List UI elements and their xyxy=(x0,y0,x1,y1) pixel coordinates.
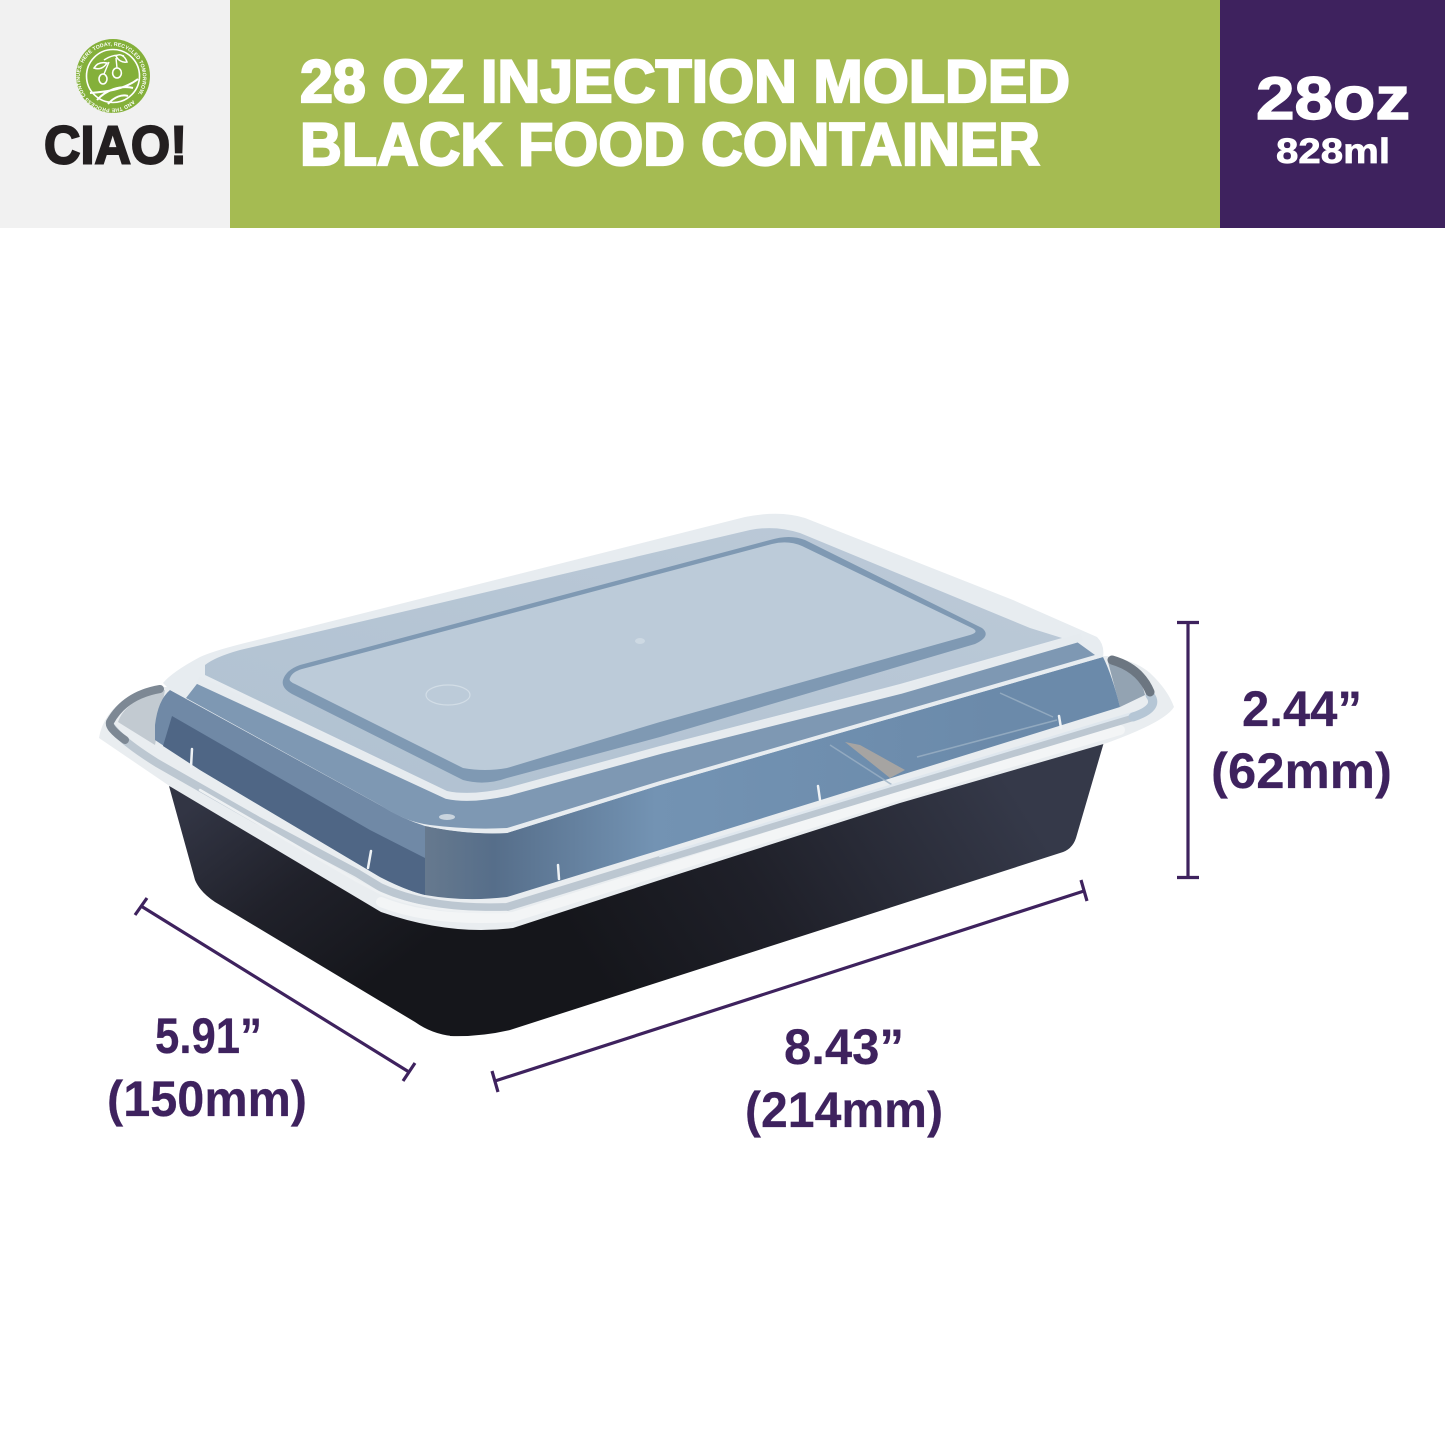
lid front wall xyxy=(425,657,1120,899)
panel: title banner xyxy=(230,0,1220,228)
container body xyxy=(169,742,1104,1036)
wall reflections xyxy=(830,693,1057,790)
rim interior corners xyxy=(118,662,1145,745)
capacity text: 28oz xyxy=(1256,65,1410,132)
product image: food container xyxy=(99,514,1174,1036)
lid raised panel xyxy=(283,537,986,783)
dimension label: width: 5.91” xyxy=(155,1008,262,1064)
panel: logo xyxy=(0,0,230,228)
dimension line: height xyxy=(1177,622,1199,878)
heading xyxy=(300,48,1070,178)
heading: BLACK FOOD CONTAINER xyxy=(300,111,1040,178)
lid clips xyxy=(191,716,1061,879)
rim tube xyxy=(110,660,1153,918)
lid white band xyxy=(198,637,1082,797)
lid left wall xyxy=(155,690,425,895)
dimension label: width xyxy=(107,1008,307,1127)
dimension label: length xyxy=(745,1019,943,1138)
dimension label: length: (214mm) xyxy=(745,1082,943,1138)
lid shoulder band xyxy=(186,642,1095,829)
logo wordmark: CIAO! xyxy=(44,116,187,176)
panel: capacity badge xyxy=(1220,0,1445,228)
capacity text: 828ml xyxy=(1276,132,1390,171)
dimension label: width: (150mm) xyxy=(107,1071,307,1127)
dimension label: height xyxy=(1211,681,1392,799)
lid top dome xyxy=(163,514,1103,833)
dimension label: length: 8.43” xyxy=(784,1019,904,1075)
dimension label: height: (62mm) xyxy=(1211,743,1392,799)
icon: recycling olive badge: AND THE PROCESS CONTINUES. HERE TODAY, RECYCLED TOMORROW. xyxy=(76,42,146,112)
heading: 28 OZ INJECTION MOLDED xyxy=(300,48,1070,115)
lid rim xyxy=(99,656,1174,930)
dimension line: width xyxy=(135,898,415,1081)
dimension line: length xyxy=(492,880,1087,1092)
capacity text xyxy=(1256,65,1410,171)
dimension label: height: 2.44” xyxy=(1242,681,1362,737)
lid inner surface xyxy=(205,528,1062,793)
